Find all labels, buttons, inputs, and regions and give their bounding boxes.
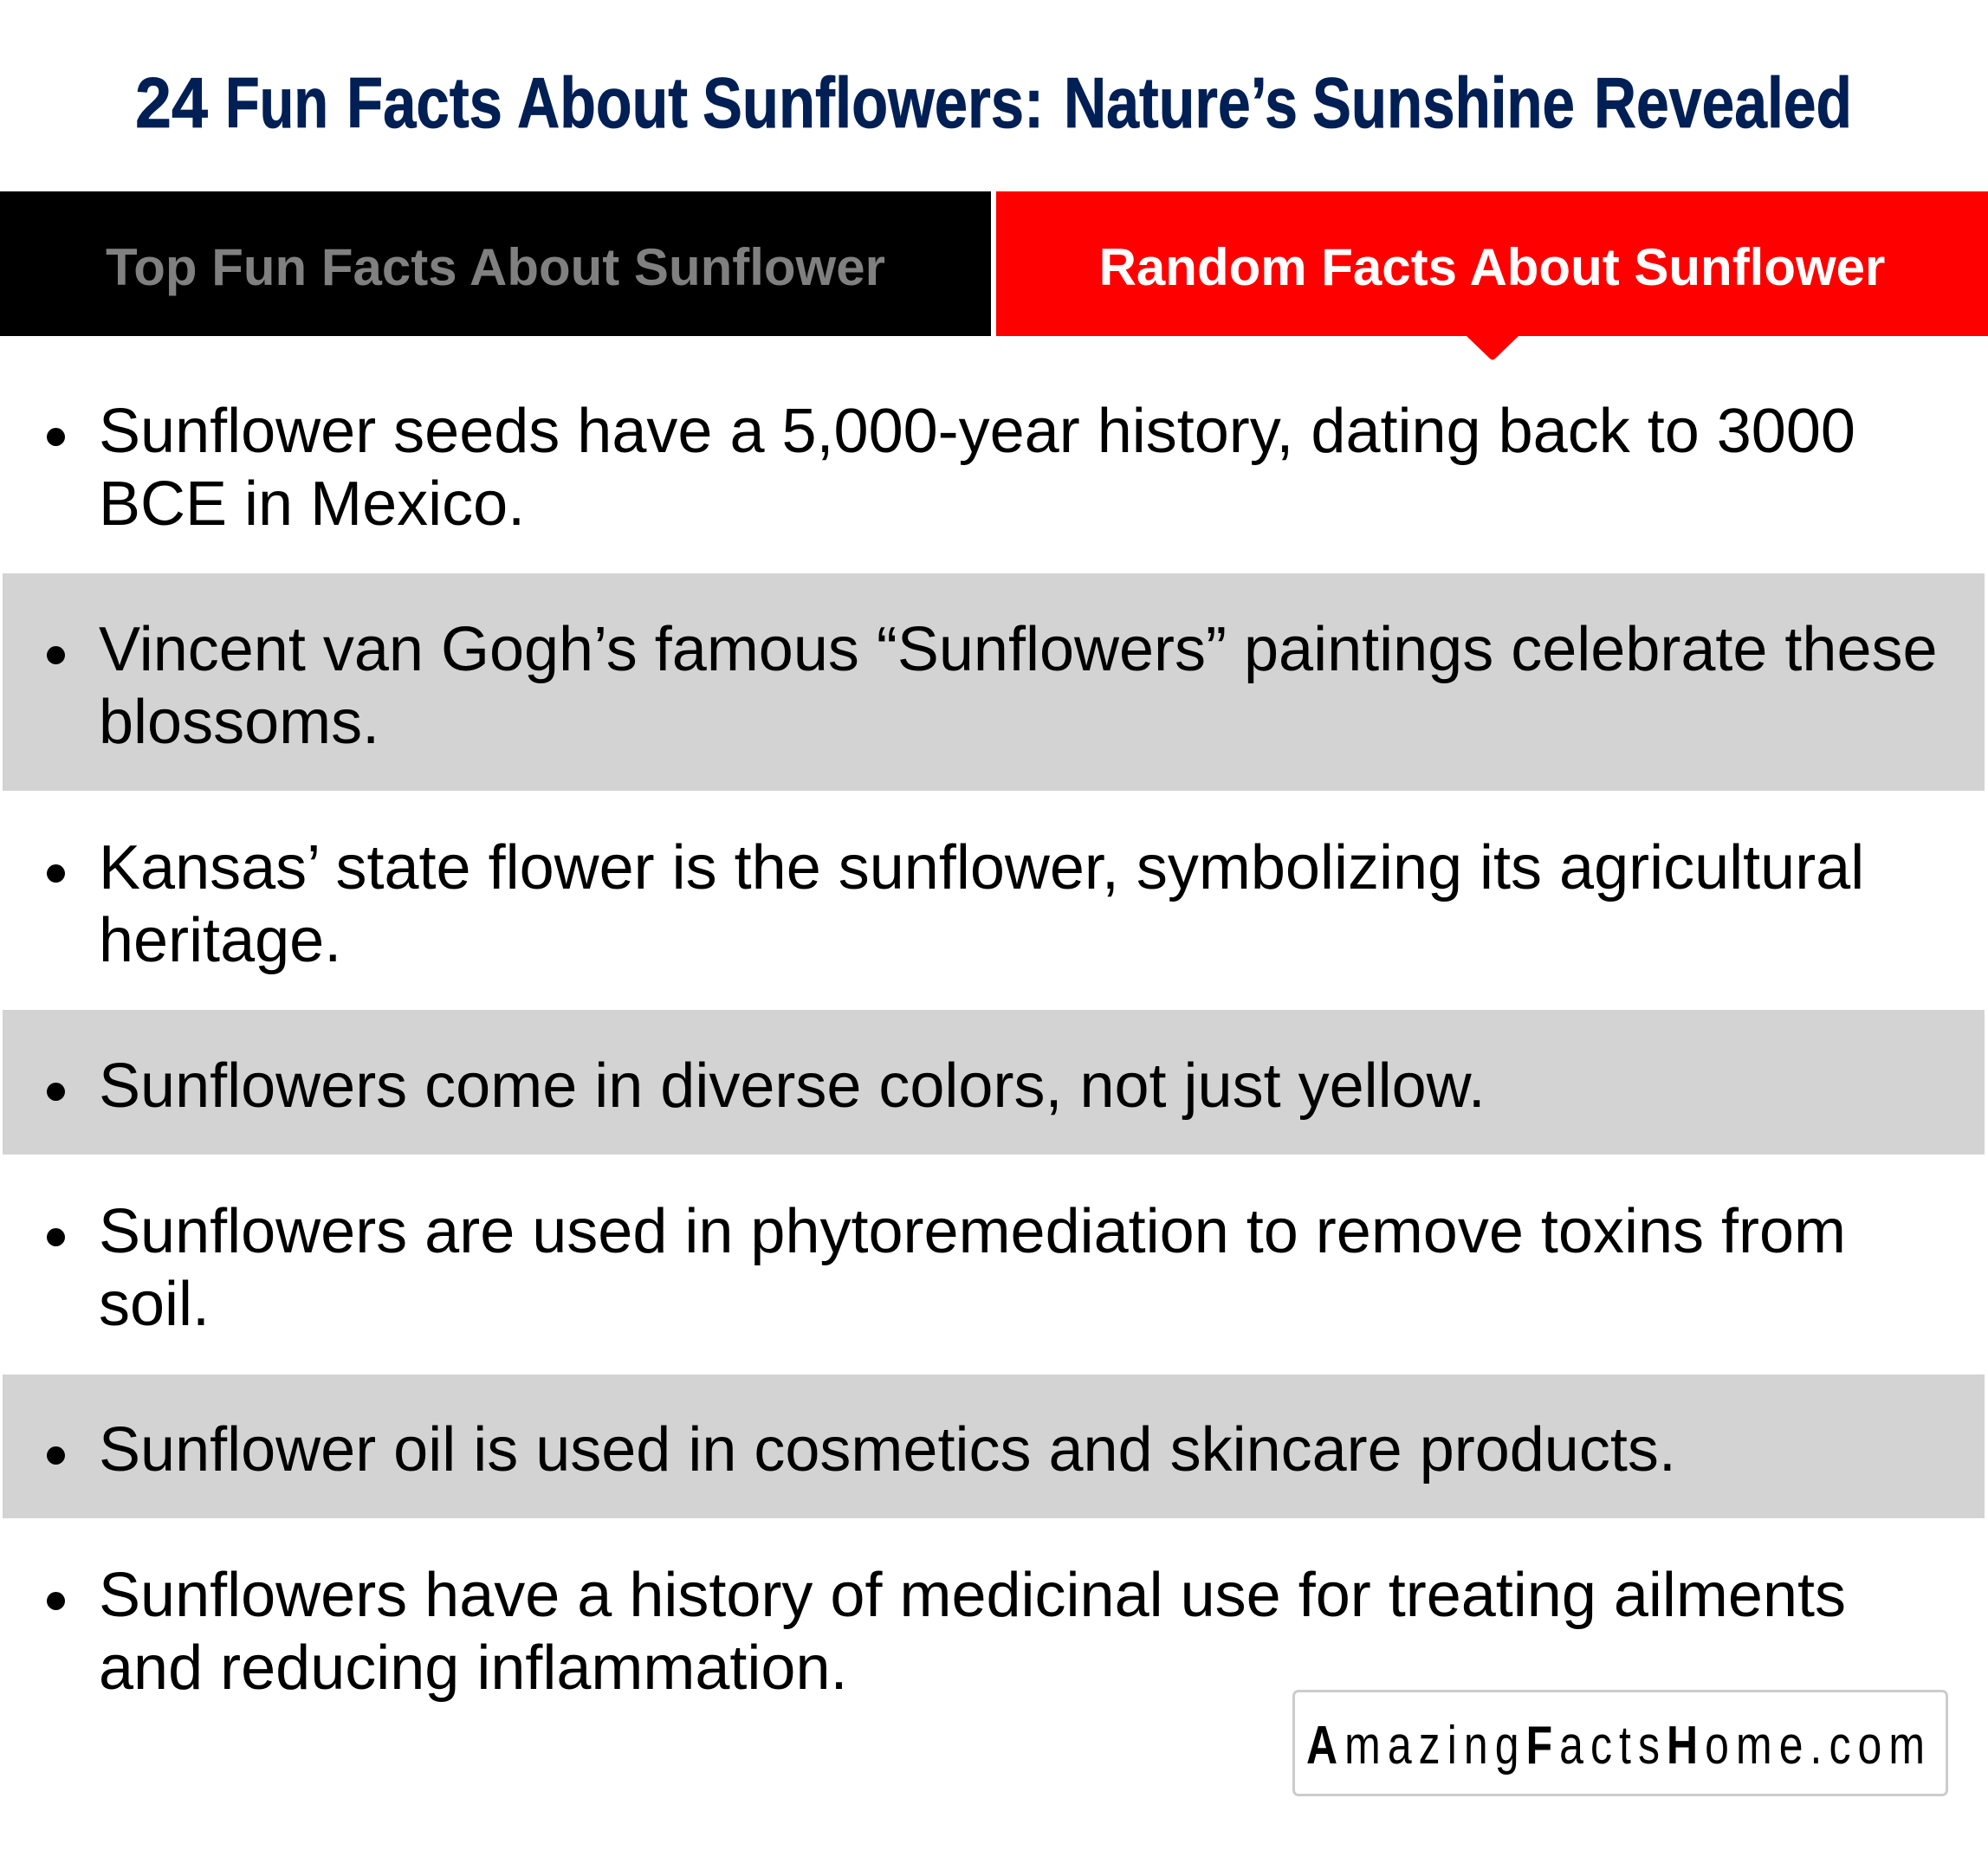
panel: row 4 background xyxy=(3,1010,1985,1155)
fact 7: Sunflowers have a history of medicinal use for treating ailments and reducing inflammation. xyxy=(99,1561,1846,1703)
title: Facts xyxy=(346,62,502,143)
icon: active tab pointer xyxy=(1467,336,1519,360)
watermark: AmazingFactsHome.com: AmazingFactsHome.com xyxy=(1306,1716,1925,1776)
title xyxy=(135,62,1852,143)
fact 1: Sunflower seeds have a 5,000-year history, dating back to 3000 BCE in Mexico. xyxy=(99,397,1855,539)
fact 6: Sunflower oil is used in cosmetics and skincare products. xyxy=(99,1415,1676,1485)
watermark: AmazingFactsHome.com xyxy=(1292,1690,1948,1796)
fact 3: Kansas’ state flower is the sunflower, symbolizing its agricultural heritage. xyxy=(99,833,1864,975)
tab: random facts (active): Random Facts About Sunflower xyxy=(1099,238,1885,296)
fact 4: Sunflowers come in diverse colors, not just yellow. xyxy=(99,1051,1486,1121)
title: Revealed xyxy=(1594,62,1852,143)
panel: row 6 background xyxy=(3,1375,1985,1518)
tab: top fun facts xyxy=(0,191,991,336)
tab: top fun facts: Top Fun Facts About Sunflower xyxy=(106,238,885,296)
title: 24 xyxy=(135,62,208,143)
tab: random facts (active) xyxy=(996,191,1988,336)
title: Sunshine xyxy=(1312,62,1575,143)
title: Nature’s xyxy=(1064,62,1298,143)
panel: row 2 background xyxy=(3,573,1985,791)
fact 5: Sunflowers are used in phytoremediation to remove toxins from soil. xyxy=(99,1197,1846,1339)
title: Fun xyxy=(225,62,328,143)
title: Sunflowers: xyxy=(703,62,1044,143)
fact 2: Vincent van Gogh’s famous “Sunflowers” paintings celebrate these blossoms. xyxy=(99,615,1938,757)
title: About xyxy=(517,62,688,143)
